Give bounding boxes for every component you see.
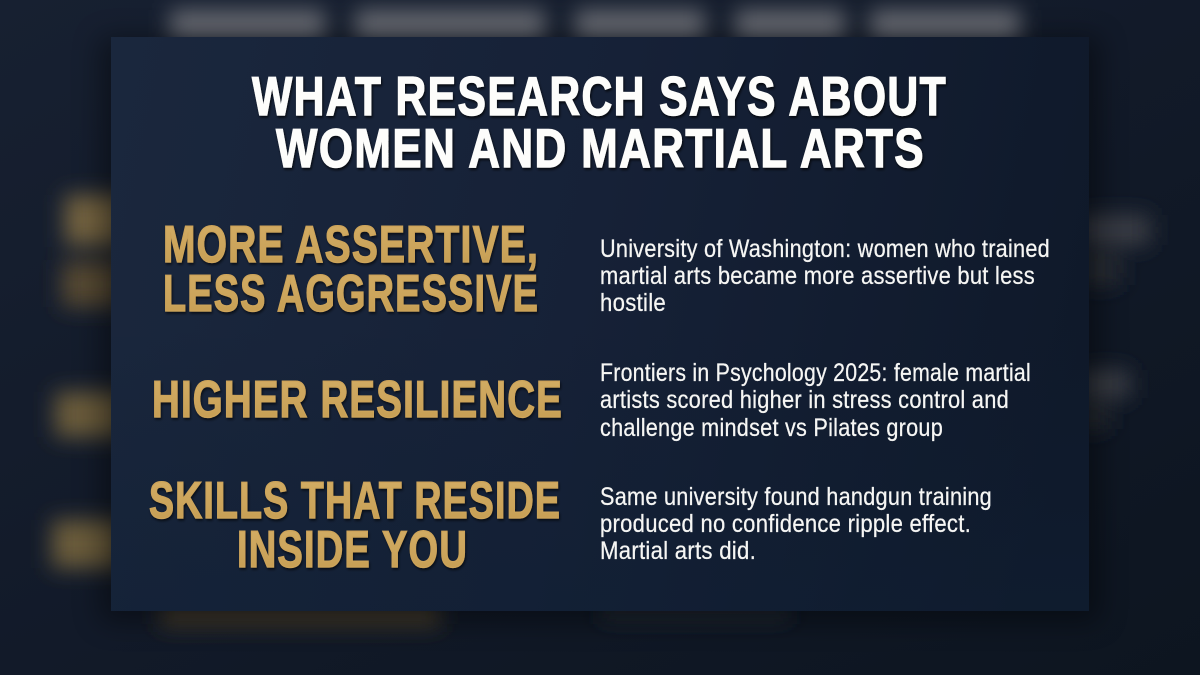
finding 3 text: Same university found handgun training — [600, 483, 992, 511]
finding 1 text: hostile — [600, 289, 666, 317]
finding 2 text: challenge mindset vs Pilates group — [600, 414, 943, 442]
finding 2 heading: higher resilience: HIGHER RESILIENCE — [152, 371, 563, 429]
finding 1 heading: more assertive — [163, 216, 539, 323]
panel shadow — [100, 37, 1100, 622]
finding 3 text: Martial arts did. — [600, 537, 756, 565]
finding 3 text: produced no confidence ripple effect. — [600, 510, 971, 538]
finding 2 text: artists scored higher in stress control and — [600, 386, 1009, 414]
finding 3 text — [600, 483, 992, 565]
main panel — [111, 37, 1089, 611]
title — [252, 65, 947, 179]
title: WHAT RESEARCH SAYS ABOUT — [252, 65, 947, 127]
finding 3 heading: skills that reside inside you: INSIDE YOU — [237, 521, 468, 579]
finding 2 text — [600, 359, 1031, 442]
finding 2 text: Frontiers in Psychology 2025: female martial — [600, 359, 1031, 387]
finding 1 text: martial arts became more assertive but less — [600, 262, 1035, 290]
finding 1 text — [600, 235, 1050, 317]
finding 1 heading: more assertive: LESS AGGRESSIVE — [163, 265, 539, 323]
finding 3 heading: skills that reside inside you: SKILLS THAT RESIDE — [149, 472, 561, 530]
title: WOMEN AND MARTIAL ARTS — [276, 117, 925, 179]
finding 3 heading: skills that reside inside you — [149, 472, 561, 579]
finding 1 text: University of Washington: women who trained — [600, 235, 1050, 263]
finding 1 heading: more assertive: MORE ASSERTIVE, — [163, 216, 539, 274]
